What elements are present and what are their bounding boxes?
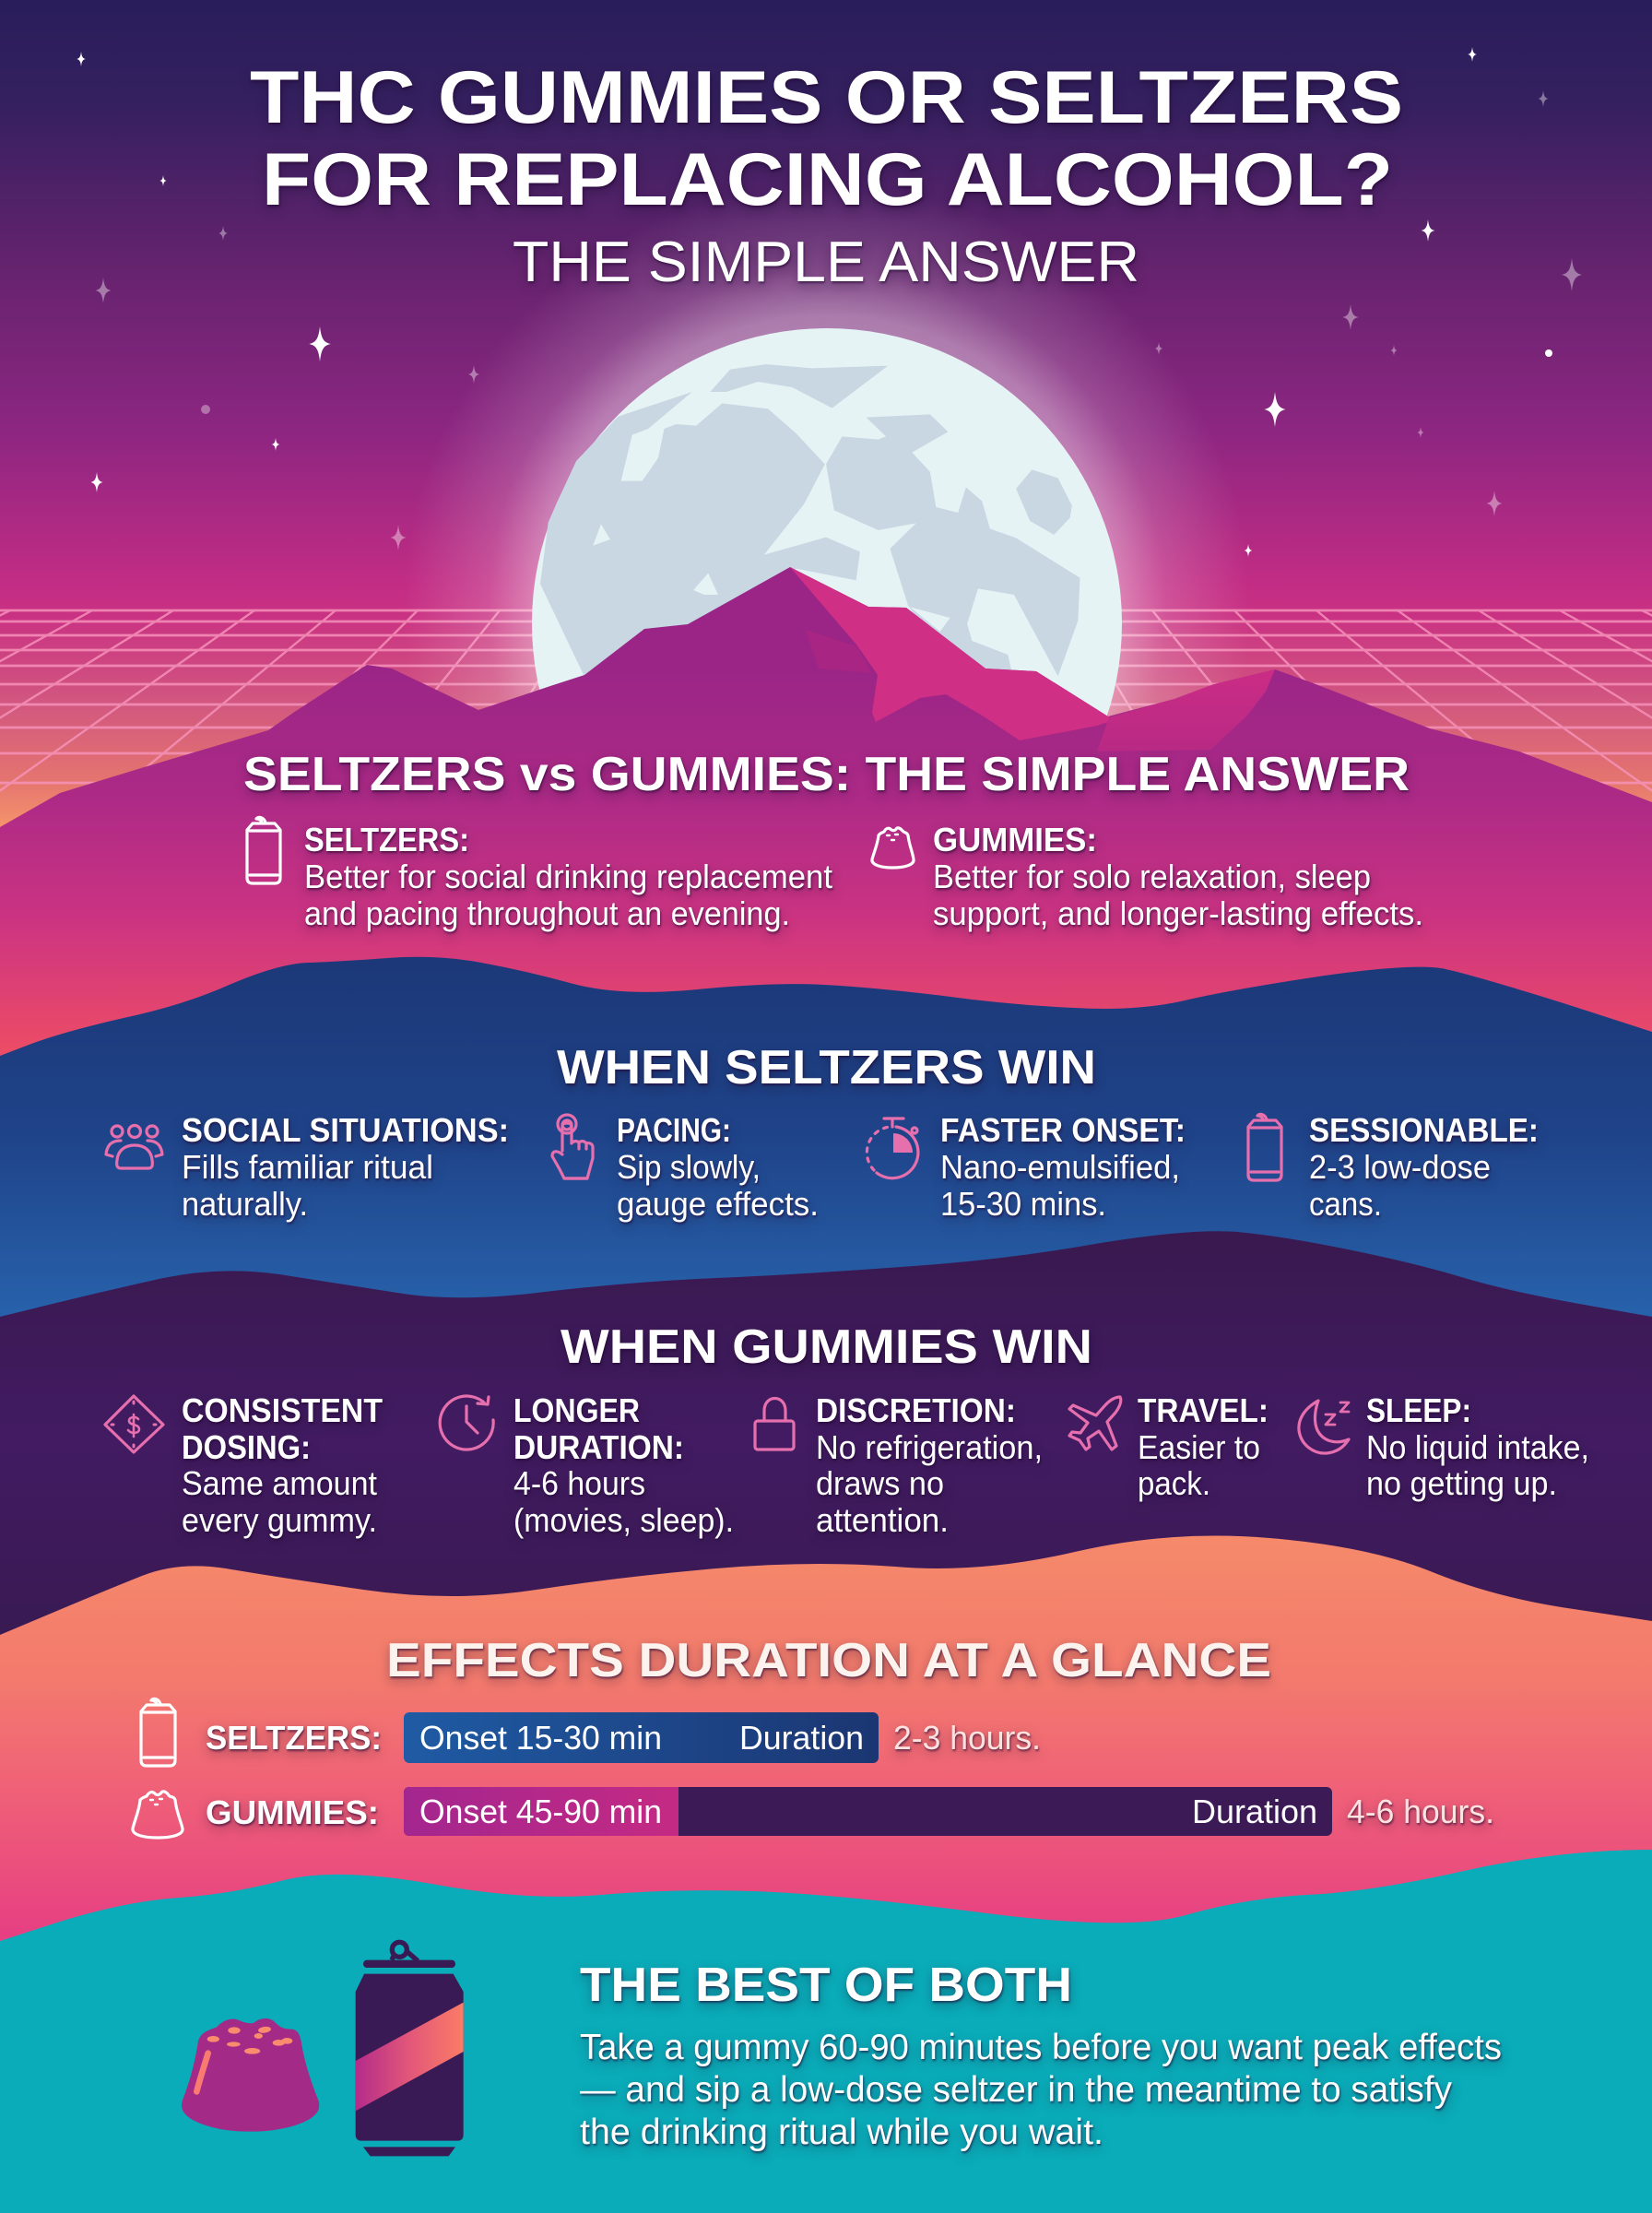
travel text: Easier to	[1138, 1428, 1260, 1466]
bar: seltzers	[404, 1712, 879, 1763]
heading: when seltzers win: WHEN SELTZERS WIN	[557, 1041, 1096, 1095]
icon: gummy	[133, 1792, 183, 1838]
discretion text: draws no	[816, 1464, 944, 1502]
icon: moon and zzz	[1299, 1401, 1349, 1453]
sessionable text: cans.	[1309, 1185, 1382, 1223]
social situations text	[182, 1111, 509, 1223]
central peak lit face	[790, 567, 1115, 740]
sessionable text	[1309, 1111, 1539, 1223]
consistent dosing text	[182, 1391, 383, 1539]
gummies text	[933, 821, 1423, 932]
faster onset text: FASTER ONSET:	[940, 1111, 1186, 1149]
icon: gummy	[872, 828, 914, 868]
illustration: gummy	[182, 2018, 319, 2132]
best of both body text: — and sip a low-dose seltzer in the meantime to satisfy	[580, 2070, 1452, 2110]
heading: effects duration: EFFECTS DURATION AT A GLANCE	[386, 1634, 1271, 1687]
icon: clock	[440, 1396, 493, 1450]
gummies text: Better for solo relaxation, sleep	[933, 858, 1371, 895]
discretion text: DISCRETION:	[816, 1391, 1016, 1429]
travel text: TRAVEL:	[1138, 1391, 1268, 1429]
seltzers text: SELTZERS:	[304, 821, 469, 858]
icon: people	[106, 1125, 162, 1168]
mountain layer: magenta	[0, 567, 1652, 1199]
icon: lock	[755, 1398, 794, 1450]
icon: can	[247, 817, 280, 883]
seltzers label: SELTZERS:	[206, 1719, 382, 1757]
travel text: pack.	[1138, 1464, 1210, 1502]
gummies text: support, and longer-lasting effects.	[933, 894, 1423, 932]
panel: effects duration	[133, 1634, 1494, 1838]
best of both body text: Take a gummy 60-90 minutes before you want peak effects	[580, 2028, 1502, 2067]
gummies label: GUMMIES:	[206, 1793, 379, 1831]
panel: simple answer	[243, 748, 1423, 932]
longer duration text: LONGER	[513, 1391, 640, 1429]
panel: best of both	[182, 1942, 1502, 2156]
sessionable text: 2-3 low-dose	[1309, 1148, 1491, 1186]
seltzers text: and pacing throughout an evening.	[304, 894, 790, 932]
pacing text	[617, 1111, 819, 1223]
heading: the best of both: THE BEST OF BOTH	[580, 1959, 1072, 2012]
sleep text	[1366, 1391, 1589, 1502]
travel text	[1138, 1391, 1268, 1502]
bar: seltzers: Onset 15-30 min	[419, 1719, 662, 1757]
pacing text: PACING:	[617, 1111, 731, 1149]
best of both body text	[580, 2028, 1502, 2152]
bar: seltzers: Duration	[739, 1719, 864, 1757]
icon: can	[1248, 1114, 1281, 1180]
icon: pointing hand	[552, 1115, 593, 1178]
faster onset text: 15-30 mins.	[940, 1185, 1106, 1223]
illustration: can	[356, 1942, 464, 2156]
best of both body text: the drinking ritual while you wait.	[580, 2112, 1103, 2152]
sessionable text: SESSIONABLE:	[1309, 1111, 1539, 1149]
heading: when gummies win: WHEN GUMMIES WIN	[560, 1320, 1092, 1374]
longer duration text: DURATION:	[513, 1428, 684, 1466]
seltzers duration value: 2-3 hours.	[893, 1719, 1041, 1757]
icon: diamond dollar	[105, 1396, 163, 1452]
pacing text: gauge effects.	[617, 1185, 819, 1223]
faster onset text	[940, 1111, 1186, 1223]
consistent dosing text: CONSISTENT	[182, 1391, 383, 1429]
perspective grid	[0, 610, 1652, 830]
heading: seltzers vs gummies: SELTZERS vs GUMMIES: THE SIMPLE ANSWER	[243, 748, 1410, 801]
social situations text: SOCIAL SITUATIONS:	[182, 1111, 509, 1149]
icon: can	[141, 1698, 175, 1766]
panel: when seltzers win	[106, 1041, 1539, 1223]
consistent dosing text: Same amount	[182, 1464, 377, 1502]
consistent dosing text: DOSING:	[182, 1428, 311, 1466]
bar: gummies: Onset 45-90 min	[419, 1793, 662, 1830]
longer duration text: (movies, sleep).	[513, 1501, 734, 1539]
panel: when gummies win	[105, 1320, 1589, 1539]
mountain layer: coral	[0, 1536, 1652, 2213]
central peak fold	[806, 630, 872, 673]
icon: stopwatch	[867, 1118, 918, 1178]
title: FOR REPLACING ALCOHOL?	[262, 138, 1393, 221]
title: THC GUMMIES OR SELTZERS	[250, 56, 1403, 139]
bar: gummies: Duration	[1192, 1793, 1317, 1830]
sleep text: no getting up.	[1366, 1464, 1557, 1502]
moon craters	[540, 364, 1080, 676]
mountain layer: teal	[0, 1850, 1652, 2213]
title	[250, 56, 1403, 221]
moon glow	[350, 166, 1309, 830]
discretion text	[816, 1391, 1043, 1539]
longer duration text	[513, 1391, 734, 1539]
consistent dosing text: every gummy.	[182, 1501, 377, 1539]
gummies text: GUMMIES:	[933, 821, 1097, 858]
moon	[532, 328, 1122, 918]
seltzers text: Better for social drinking replacement	[304, 858, 832, 895]
sleep text: No liquid intake,	[1366, 1428, 1589, 1466]
bar: gummies	[404, 1787, 1332, 1836]
social situations text: naturally.	[182, 1185, 308, 1223]
mountain layer: blue	[0, 957, 1652, 2213]
mountain layer: dark purple	[0, 1231, 1652, 2213]
subtitle: THE SIMPLE ANSWER	[513, 231, 1139, 294]
faster onset text: Nano-emulsified,	[940, 1148, 1180, 1186]
pacing text: Sip slowly,	[617, 1148, 761, 1186]
icon: airplane	[1069, 1397, 1121, 1450]
discretion text: attention.	[816, 1501, 949, 1539]
longer duration text: 4-6 hours	[513, 1464, 645, 1502]
gummies duration value: 4-6 hours.	[1347, 1793, 1494, 1830]
social situations text: Fills familiar ritual	[182, 1148, 433, 1186]
stars	[77, 47, 1582, 557]
seltzers text	[304, 821, 832, 932]
sleep text: SLEEP:	[1366, 1391, 1471, 1429]
sky background	[0, 0, 1652, 922]
right peak lit face	[1097, 669, 1275, 751]
discretion text: No refrigeration,	[816, 1428, 1043, 1466]
